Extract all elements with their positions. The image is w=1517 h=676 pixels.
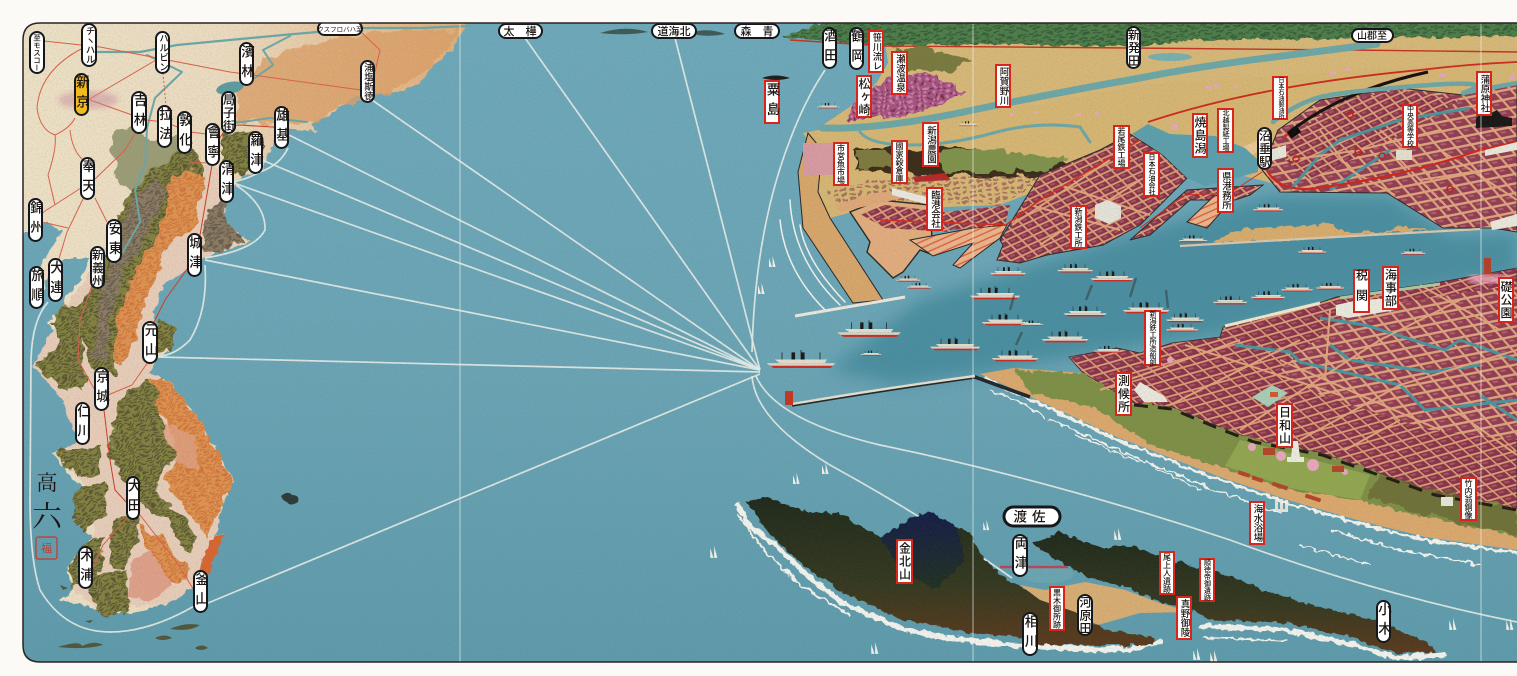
breakwater island — [1212, 224, 1430, 243]
surf along south shore — [980, 377, 1517, 565]
mountains: west ridges south — [55, 445, 107, 588]
label: Harbin: ハルビン — [157, 34, 169, 72]
red seal: 福 — [41, 541, 52, 555]
mountains: south pink range — [163, 423, 200, 470]
label: Koriyama — [1352, 29, 1393, 42]
label: Kuroki palace — [1050, 587, 1064, 630]
city blush: Hsinking — [58, 91, 118, 109]
railway: loop — [1266, 142, 1517, 189]
land: main city — [1069, 268, 1517, 510]
label: Tunhua: 敦化 — [177, 112, 193, 152]
label: Joshin: 城津 — [187, 235, 203, 274]
lake: Khanka — [216, 82, 244, 94]
buildings: palace garden — [1252, 385, 1288, 407]
railway: plain curve — [1148, 62, 1517, 122]
top cartouche hills — [600, 29, 725, 36]
label: Ryotsu: 両津 — [1012, 536, 1028, 575]
label: Shibata: 新発田 — [1126, 27, 1140, 68]
factories: red works — [913, 173, 950, 182]
label: Chichihar: チヽハル — [84, 26, 95, 64]
statue plinth — [1441, 497, 1453, 506]
label: Kirin: 吉林 — [132, 93, 147, 132]
label: National warehouse: 國家穀倉庫 — [895, 142, 904, 183]
label: Senami — [892, 52, 907, 94]
land: long pier upper right — [1130, 185, 1263, 240]
label: Juntoku site — [1200, 558, 1214, 601]
label: Historic site: 尾上人遺跡 — [1162, 553, 1172, 593]
label: Historic site — [1160, 552, 1174, 594]
mountains: Gyeongsang pink — [128, 550, 172, 602]
mountains: Busan cape — [199, 534, 225, 575]
land: city east blocks — [1280, 285, 1517, 440]
hills: bright slope of Hiyoriyama — [1225, 440, 1370, 500]
town: scattered houses on the plain — [825, 176, 1050, 205]
label: Aomori — [735, 24, 779, 38]
label: Hokkaido — [652, 24, 696, 38]
label: National warehouse — [892, 141, 907, 183]
label: Ogi: 小木 — [1376, 602, 1392, 641]
canal: east — [1330, 150, 1390, 190]
label: Awashima: 粟島 — [764, 82, 780, 122]
railway: diagonal — [880, 140, 1140, 225]
park blossoms — [1470, 275, 1510, 283]
label: Rinko company — [927, 188, 942, 230]
land: rail yard — [910, 225, 1007, 268]
bridge: Ryotsu — [1000, 566, 1068, 568]
hills: dark pine edge — [1134, 405, 1517, 510]
land: sand spit — [798, 133, 883, 303]
mountains: central dark ridge — [108, 515, 138, 570]
Sado island — [738, 497, 1445, 658]
mountains: south coast ridge — [85, 570, 130, 616]
label: Shipyard — [1145, 309, 1160, 367]
label: Dairen: 大連 — [48, 260, 64, 300]
label: Mano mausoleum: 真野御陵 — [1178, 598, 1190, 638]
river: Amur — [97, 26, 470, 52]
land: pale pink Korean lowland — [33, 165, 232, 610]
mountains: northern grey-green foothills — [112, 125, 195, 195]
railways — [37, 33, 380, 590]
land: eastern Sado mountains — [1031, 532, 1437, 653]
land: Kuninaka plain — [1020, 582, 1190, 625]
mountains: west coast ridges — [35, 298, 88, 388]
label: Park: 礎公園 — [1499, 280, 1513, 320]
railway: pier line — [1140, 172, 1262, 228]
label: Port office — [1218, 169, 1233, 212]
label: Rashin: 羅津 — [248, 133, 264, 172]
label: Hsinking: 新京 — [74, 75, 90, 114]
pier: quay — [1225, 303, 1320, 326]
label: Oil company: 日本石油会社 — [1148, 154, 1156, 197]
label: Khabarovsk — [317, 22, 363, 35]
mountains: Wonsan point — [157, 318, 177, 353]
mountains: Musu coast — [205, 198, 248, 252]
Niigata north city — [835, 134, 1263, 278]
railway: embankment — [1284, 72, 1427, 137]
mountains: south orange range — [150, 375, 233, 535]
label: High school — [1403, 104, 1417, 148]
label: Seishin: 清津 — [219, 162, 235, 201]
label: Shrine: 蒲原神社 — [1478, 74, 1490, 113]
label: Wakao works — [1114, 126, 1129, 168]
sailboats — [710, 256, 1513, 662]
buildings: green embankment — [1340, 284, 1440, 298]
hills: green dune belt — [1014, 370, 1517, 536]
palace: shrine — [1476, 110, 1512, 128]
label: Sasagawa: 笹川流レ — [870, 32, 882, 70]
label: Mount Kinpoku: 金北山 — [898, 541, 912, 581]
label: Ryojun: 旅順 — [29, 268, 45, 307]
breakwater upper — [1180, 229, 1480, 246]
label: Aikawa: 相川 — [1022, 614, 1038, 654]
warehouses — [892, 188, 930, 205]
river: Sungari — [145, 55, 182, 165]
land: second pier — [1187, 195, 1232, 228]
signature calligraphy — [33, 472, 60, 528]
land: pink reclaimed square — [803, 143, 835, 175]
buildings: shrine in garden — [1270, 392, 1278, 397]
land: Yakeshima works — [1225, 140, 1262, 160]
label: Niigata ironworks — [1071, 206, 1086, 248]
label: Rinko company: 臨港会社 — [929, 189, 941, 229]
railway: top — [790, 40, 1517, 52]
canal: inner — [1290, 108, 1470, 190]
mountains: olive range north — [78, 145, 206, 376]
buildings: Tekko works — [1095, 200, 1121, 224]
label: Oil company — [1144, 153, 1159, 197]
label: Nuttari station: 沼垂駅 — [1258, 129, 1272, 168]
buildings: white bridgeheads — [1485, 142, 1517, 230]
label: Keijo: 京城 — [94, 369, 110, 408]
land: town band to rail yard — [945, 205, 1010, 230]
label: Agano river: 阿賀野川 — [998, 67, 1009, 105]
blossom trees along the plain — [1010, 68, 1515, 129]
locomotive smoke — [1287, 125, 1301, 139]
river: Agano — [822, 44, 1377, 128]
land: Nuttari dense quarter — [1285, 90, 1460, 180]
label: Yuki: 雄基 — [274, 108, 290, 147]
hill: Senami olive slope — [895, 48, 972, 72]
label: Takeuchi statue: 竹内翁銅像 — [1464, 478, 1473, 519]
surf along spit — [780, 200, 845, 310]
vertical fold lines — [460, 22, 1481, 662]
label: High school: 中央高等学校 — [1406, 104, 1414, 148]
breakwater: river mouth north — [795, 297, 905, 316]
label: Khabarovsk: クスフロバハ至 — [317, 26, 363, 34]
forest: Senami pink grove — [842, 74, 965, 120]
land: western Sado mountains — [746, 497, 1154, 645]
label: Yakeshima lagoon: 焼島潟 — [1193, 116, 1207, 155]
mountain: Kinpoku peak — [880, 510, 965, 590]
hill: green dune — [928, 150, 1068, 172]
mountains: Gyeongsang orange — [138, 522, 190, 582]
label: Niigata farm: 新潟農園 — [925, 125, 937, 164]
streets — [1100, 285, 1517, 455]
label: Port office: 県港務所 — [1220, 172, 1232, 210]
label: Hiyoriyama: 日和山 — [1278, 406, 1292, 445]
label: Hokuetsu paper — [1218, 109, 1233, 153]
label: Genzan: 元山 — [142, 323, 158, 362]
red torii markers — [1293, 112, 1453, 192]
label: Fusan: 釜山 — [193, 572, 209, 611]
label: Oil refinery — [1273, 77, 1287, 120]
small dark island — [281, 493, 298, 504]
label: Fish market: 市営魚市場 — [836, 143, 846, 185]
label: Moppo: 木浦 — [78, 548, 94, 587]
station buildings — [1270, 145, 1286, 161]
lake: Kamo — [1018, 565, 1074, 583]
label: Hokkaido: 道海北 — [658, 24, 690, 38]
breakwater: river mouth south — [792, 377, 1030, 405]
label: Oil refinery: 日本石油製油所 — [1277, 77, 1284, 120]
label: Mukden: 奉天 — [80, 159, 96, 198]
river: Shinano branch — [1273, 83, 1517, 122]
label: Koriyama: 山郡至 — [1357, 30, 1387, 42]
label: Takeuchi statue — [1461, 478, 1476, 520]
hill: olive dune west — [855, 150, 900, 170]
label: Lafa: 拉法 — [157, 107, 173, 146]
label: Shrine — [1477, 72, 1491, 115]
lighthouse: red tower — [785, 391, 793, 405]
label: Customs: 税関 — [1354, 269, 1368, 309]
mountains: south olive range — [108, 378, 195, 555]
land: Manchuria and Korea — [15, 15, 472, 613]
mountains: northern east coast — [222, 132, 268, 174]
label: Mishan: 濱林 — [239, 43, 255, 84]
mountains: brown range north — [92, 175, 168, 365]
label: Moscow: 至モスコー — [32, 33, 42, 71]
label: Jinsen: 仁川 — [75, 404, 91, 443]
monument — [1287, 441, 1304, 462]
canals — [1235, 345, 1517, 410]
label: Kyokushigai: 局子街 — [222, 94, 236, 132]
label: Sinuiju: 新義州 — [90, 247, 104, 288]
label: Sado: 渡佐 — [1014, 510, 1050, 524]
label: Tsuruoka: 鶴岡 — [849, 28, 865, 68]
label: Antung: 安東 — [106, 221, 122, 260]
breakwaters and lighthouse — [780, 200, 1030, 405]
label: Juntoku site: 順徳帝御遺跡 — [1204, 558, 1211, 601]
pavilions — [1238, 448, 1344, 502]
river: Ussuri — [255, 36, 290, 78]
river: Yalu — [123, 165, 145, 252]
label: Niigata farm — [923, 123, 938, 166]
land: canal bank town — [860, 205, 950, 232]
lighthouse tower — [1484, 258, 1491, 282]
land: orange steppe of Primorye — [236, 28, 462, 125]
land: Nuttari district — [1262, 82, 1517, 232]
label: Moscow — [30, 32, 44, 73]
ship smoke — [1010, 278, 1168, 345]
surf around Sado — [738, 505, 1445, 658]
cherry trees on Hiyoriyama — [1167, 357, 1348, 475]
label: Sakata: 酒田 — [822, 28, 838, 68]
label: Hokuetsu paper: 北越製紙工場 — [1222, 109, 1230, 153]
land: Niigata east quarter — [997, 134, 1187, 263]
label: Matsugasaki: 松ヶ崎 — [857, 77, 871, 116]
label: Beach: 海水浴場 — [1252, 503, 1263, 543]
hills: top green ridge — [780, 20, 1517, 47]
label: Vladivostok: 浦塩斯徳 — [362, 62, 374, 101]
map of Manchuria and Korea — [15, 15, 472, 650]
label: Wakao works: 若尾鉄工場 — [1117, 126, 1126, 168]
Niigata east city — [1148, 62, 1517, 246]
lake: plain pond — [1148, 53, 1192, 61]
mountains: orange range east — [112, 170, 205, 365]
label: Aomori: 森 青 — [740, 24, 774, 38]
signature calligraphy: 六 — [32, 492, 63, 536]
buildings: weather station — [1134, 382, 1168, 402]
label: Fish market — [834, 143, 848, 185]
label: Shipyard: 新潟鉄工所造船部 — [1149, 309, 1156, 367]
buildings: customs house — [1336, 298, 1398, 318]
bathing huts — [1273, 499, 1288, 512]
buildings: school — [1396, 150, 1412, 160]
Yakeshima bay water — [1132, 124, 1258, 186]
label: Senami: 瀬波温泉 — [894, 53, 906, 92]
label: Weather station: 測候所 — [1116, 373, 1130, 414]
land: plain south of Agano — [803, 60, 1517, 218]
label: Kuroki palace: 黒木御所跡 — [1052, 588, 1062, 629]
land: sand apron of docks — [850, 200, 933, 278]
Niigata south city — [980, 258, 1517, 550]
red seal — [36, 537, 57, 559]
canal: Tsusen river — [860, 125, 1090, 145]
signature calligraphy: 高 — [36, 467, 58, 497]
river: Tumen — [235, 118, 307, 123]
label: Maritime office: 海事部 — [1384, 268, 1398, 308]
train — [1292, 72, 1428, 130]
label: Niigata ironworks: 新潟鉄工所 — [1074, 206, 1083, 248]
land: inner block north — [835, 192, 915, 212]
street network — [1012, 160, 1150, 245]
label: Kawarada: 河原田 — [1078, 596, 1092, 635]
label: Taiden: 大田 — [126, 478, 141, 518]
Awa island — [762, 76, 790, 80]
streets — [1290, 130, 1517, 210]
hill: dune shadow — [855, 147, 1070, 176]
Japan mainland plain — [780, 20, 1517, 303]
label: Jinzhou: 錦州 — [28, 199, 44, 240]
hills: brown east dune — [1370, 475, 1517, 536]
ships — [767, 102, 1426, 368]
label: Hoeryong: 會寧 — [205, 125, 221, 164]
label: Karafuto: 太 樺 — [504, 24, 536, 38]
label: Sado — [1004, 507, 1060, 526]
label: Karafuto — [499, 24, 542, 38]
islands off Korea — [58, 585, 208, 650]
land: plain north of Agano — [820, 30, 1517, 150]
harbour water — [830, 195, 1517, 385]
land: shore and sand — [980, 368, 1517, 550]
